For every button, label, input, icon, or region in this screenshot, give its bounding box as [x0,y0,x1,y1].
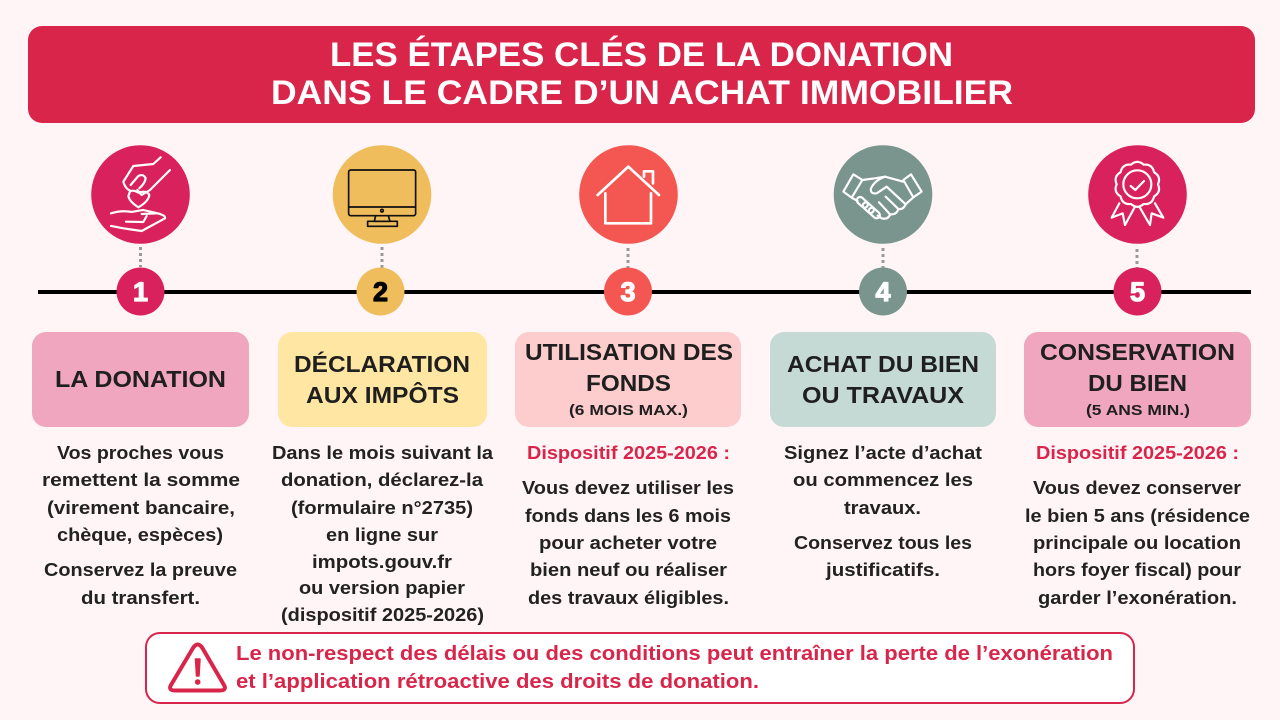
title banner [28,26,1255,123]
text: step 1 description: Conservez la preuve [44,560,237,580]
icon: house [579,145,678,244]
text: step 3 description: des travaux éligibles. [528,588,729,608]
card heading: déclaration aux impôts [278,332,487,427]
icon: award rosette [1088,145,1187,244]
text: step 1 description: remettent la somme [42,470,240,490]
text: step 2 description [272,443,494,625]
card heading: déclaration aux impôts: AUX IMPÔTS [306,381,459,408]
text: step 3 description: bien neuf ou réaliser [530,560,727,580]
callout: warning [146,633,1134,703]
step number 5: 5 [1130,277,1145,307]
text: step 1 description: (virement bancaire, [47,498,235,518]
card heading: utilisation des fonds: UTILISATION DES [525,339,733,365]
text: step 2 description: (dispositif 2025-2026) [281,605,484,625]
text: step 4 description: travaux. [844,498,921,518]
text: step 1 description: chèque, espèces) [57,525,223,545]
step 3: utilisation des fonds [515,145,741,608]
step 5: conservation du bien [1024,145,1251,608]
text: step 2 description: en ligne sur [326,525,438,545]
card heading: conservation du bien: CONSERVATION [1040,339,1235,365]
icon: computer monitor [333,145,431,244]
card heading: achat du bien ou travaux [770,332,996,427]
text: step 5 description: le bien 5 ans (résidence [1025,506,1250,526]
timeline line [38,290,1251,294]
step 1: la donation [32,145,249,608]
step 2: déclaration [272,145,494,625]
text: step 2 description: donation, déclarez-la [281,470,484,490]
step number 3: 3 [620,277,636,307]
icon: warning triangle [170,644,225,690]
text: step 3 description: pour acheter votre [539,533,717,553]
text: step 4 description: ou commencez les [793,470,973,490]
step number 4: 4 [875,277,891,307]
warning text: Le non-respect des délais ou des conditions peut entraîner la perte de l’exonération [236,642,1113,665]
title banner: LES ÉTAPES CLÉS DE LA DONATION [330,36,953,74]
card heading: la donation [32,332,249,427]
card heading: conservation du bien: (5 ANS MIN.) [1086,402,1190,419]
card heading: utilisation des fonds: (6 MOIS MAX.) [569,402,688,419]
text: step 4 description: justificatifs. [825,560,940,580]
step number 3 [604,268,652,316]
card heading: achat du bien ou travaux: ACHAT DU BIEN [787,351,979,377]
text: step 5 description: Vous devez conserver [1033,478,1241,498]
text: step 1 description: du transfert. [81,588,200,608]
text: step 5 description: Dispositif 2025-2026 : [1036,443,1239,463]
text: step 4 description: Conservez tous les [794,533,972,553]
text: step 5 description [1025,443,1250,608]
text: step 5 description: garder l’exonération. [1038,588,1237,608]
step number 2: 2 [373,277,388,307]
title banner: DANS LE CADRE D’UN ACHAT IMMOBILIER [271,74,1013,112]
text: step 2 description: (formulaire n°2735) [291,498,473,518]
warning text: et l’application rétroactive des droits de donation. [236,670,759,693]
step number 2 [356,268,404,316]
text: step 5 description: hors foyer fiscal) pour [1033,560,1241,580]
text: step 5 description: principale ou location [1033,533,1241,553]
text: step 3 description: fonds dans les 6 mois [525,506,731,526]
text: step 1 description: Vos proches vous [57,443,224,463]
step number 1: 1 [133,277,148,307]
step number 4 [859,268,907,316]
card heading: déclaration aux impôts: DÉCLARATION [294,350,470,377]
text: step 3 description: Dispositif 2025-2026 : [527,443,730,463]
text: step 3 description [522,443,734,608]
text: step 2 description: Dans le mois suivant la [272,443,494,463]
card heading: achat du bien ou travaux: OU TRAVAUX [802,382,965,408]
text: step 4 description: Signez l’acte d’achat [784,443,982,463]
step number 5 [1114,268,1162,316]
warning text [236,642,1113,693]
icon: handshake [834,145,932,244]
card heading: conservation du bien [1024,332,1251,427]
card heading: la donation: LA DONATION [55,366,226,392]
card heading: utilisation des fonds [515,332,741,427]
text: step 2 description: ou version papier [299,578,465,598]
text: step 3 description: Vous devez utiliser les [522,478,734,498]
text: step 4 description [784,443,982,580]
step 4: achat du bien [770,145,996,580]
card heading: conservation du bien: DU BIEN [1088,370,1187,396]
icon: hands giving a heart [91,145,190,244]
text: step 1 description [42,443,240,608]
step number 1 [116,268,164,316]
text: step 2 description: impots.gouv.fr [312,552,452,572]
card heading: utilisation des fonds: FONDS [586,370,671,396]
